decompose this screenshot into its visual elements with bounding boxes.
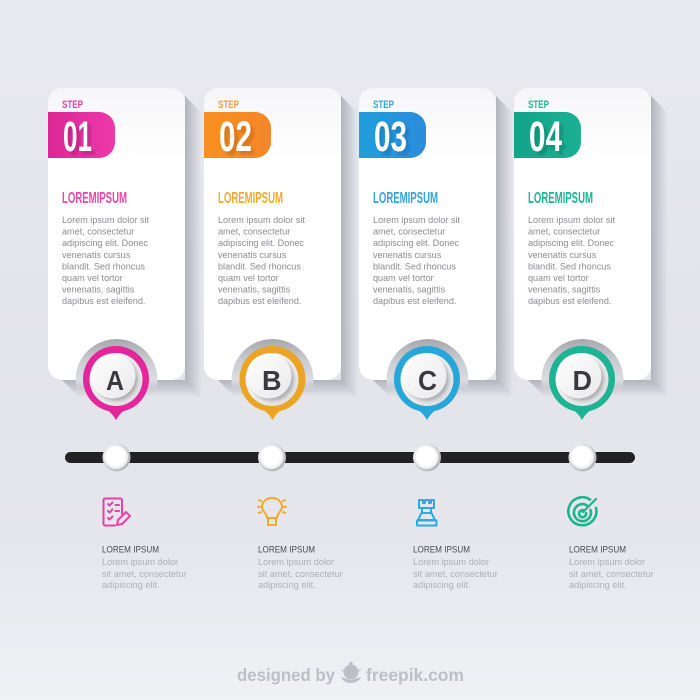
pin D <box>549 346 615 420</box>
body text: venenatis cursus <box>62 250 131 260</box>
body text: venenatis, sagittis <box>62 284 135 294</box>
body text: venenatis, sagittis <box>528 284 601 294</box>
icon: freepik logo <box>340 662 362 683</box>
panel: step 02 <box>204 88 358 421</box>
number tab: 04 <box>529 113 562 161</box>
number tab: 04 <box>533 117 566 165</box>
body text: amet, consectetur <box>373 226 445 236</box>
text block: item 1: sit amet, consectetur <box>102 569 187 579</box>
pin C: C <box>418 365 437 396</box>
body text: quam vel tortor <box>373 273 434 283</box>
body text: amet, consectetur <box>218 226 290 236</box>
text block: item 2: sit amet, consectetur <box>258 569 343 579</box>
body text: adipiscing elit. Donec <box>62 238 148 248</box>
text block: item 3: sit amet, consectetur <box>413 569 498 579</box>
text block: item 2: Lorem ipsum dolor <box>258 557 334 567</box>
body text: Lorem ipsum dolor sit <box>373 215 460 225</box>
text block: item 4: LOREM IPSUM <box>569 544 626 554</box>
body text: quam vel tortor <box>62 273 123 283</box>
text block: item 4 <box>569 544 654 590</box>
step label: STEP <box>62 99 83 111</box>
heading: LOREMIPSUM <box>373 190 438 207</box>
heading: LOREMIPSUM <box>218 190 283 207</box>
text block: item 3: Lorem ipsum dolor <box>413 557 489 567</box>
number tab <box>204 112 271 165</box>
number tab: 02 <box>223 117 256 165</box>
step label: STEP <box>218 99 239 111</box>
text block: item 2 <box>258 544 343 590</box>
number tab <box>359 112 426 165</box>
timeline bar <box>65 444 635 472</box>
number tab: 02 <box>221 115 254 163</box>
number tab: 03 <box>378 117 411 165</box>
body text: dapibus est eleifend. <box>528 296 611 306</box>
text block: item 3 <box>413 544 498 590</box>
text block: item 4: Lorem ipsum dolor <box>569 557 645 567</box>
text block: item 3: adipiscing elit. <box>413 580 471 590</box>
body text: venenatis cursus <box>218 250 287 260</box>
icon: light bulb <box>258 498 286 525</box>
body text: Lorem ipsum dolor sit <box>218 215 305 225</box>
body text: venenatis cursus <box>528 250 597 260</box>
body text: venenatis, sagittis <box>373 284 446 294</box>
body text: adipiscing elit. Donec <box>373 238 459 248</box>
body text: blandit. Sed rhoncus <box>528 262 611 272</box>
number tab: 01 <box>65 115 94 163</box>
pin A <box>83 346 149 420</box>
number tab: 03 <box>376 115 409 163</box>
body text: quam vel tortor <box>528 273 589 283</box>
timeline knob C <box>413 444 441 472</box>
body text: blandit. Sed rhoncus <box>62 262 145 272</box>
body text: quam vel tortor <box>218 273 279 283</box>
footer credit: freepik.com <box>366 665 464 685</box>
icon: target <box>568 497 596 525</box>
pin D: D <box>572 365 592 396</box>
body text: venenatis, sagittis <box>218 284 291 294</box>
text block: item 1 <box>102 544 187 590</box>
step label: STEP <box>373 99 394 111</box>
body text: amet, consectetur <box>62 226 134 236</box>
panel: step 01 <box>48 88 202 421</box>
body text: adipiscing elit. Donec <box>218 238 304 248</box>
body text: venenatis cursus <box>373 250 442 260</box>
icon: chess rook <box>417 500 436 526</box>
heading: LOREMIPSUM <box>528 190 593 207</box>
number tab: 04 <box>531 115 564 163</box>
text block: item 4: adipiscing elit. <box>569 580 627 590</box>
body text: blandit. Sed rhoncus <box>373 262 456 272</box>
body text: adipiscing elit. Donec <box>528 238 614 248</box>
text block: item 1: LOREM IPSUM <box>102 544 159 554</box>
heading: LOREMIPSUM <box>62 190 127 207</box>
pin B <box>240 346 306 420</box>
timeline knob B <box>258 444 286 472</box>
text block: item 3: LOREM IPSUM <box>413 544 470 554</box>
timeline knob A <box>102 444 130 472</box>
number tab: 03 <box>374 113 407 161</box>
body text: amet, consectetur <box>528 226 600 236</box>
number tab <box>514 112 581 165</box>
footer credit: designed by <box>237 665 335 685</box>
pin B: B <box>262 365 282 396</box>
body text: dapibus est eleifend. <box>62 296 145 306</box>
text block: item 1: adipiscing elit. <box>102 580 160 590</box>
number tab: 01 <box>63 113 92 161</box>
icon: checklist with pencil <box>104 498 130 526</box>
text block: item 2: adipiscing elit. <box>258 580 316 590</box>
pin A: A <box>106 365 124 396</box>
body text: Lorem ipsum dolor sit <box>62 215 149 225</box>
pin C <box>394 346 460 420</box>
number tab <box>48 112 115 165</box>
text block: item 1: Lorem ipsum dolor <box>102 557 178 567</box>
body text: blandit. Sed rhoncus <box>218 262 301 272</box>
body text: Lorem ipsum dolor sit <box>528 215 615 225</box>
number tab: 02 <box>219 113 252 161</box>
text block: item 2: LOREM IPSUM <box>258 544 315 554</box>
footer credit <box>237 662 464 685</box>
number tab: 01 <box>67 117 96 165</box>
panel: step 03 <box>359 88 513 421</box>
body text: dapibus est eleifend. <box>373 296 456 306</box>
body text: dapibus est eleifend. <box>218 296 301 306</box>
timeline knob D <box>568 444 596 472</box>
step label: STEP <box>528 99 549 111</box>
panel: step 04 <box>514 88 668 421</box>
text block: item 4: sit amet, consectetur <box>569 569 654 579</box>
